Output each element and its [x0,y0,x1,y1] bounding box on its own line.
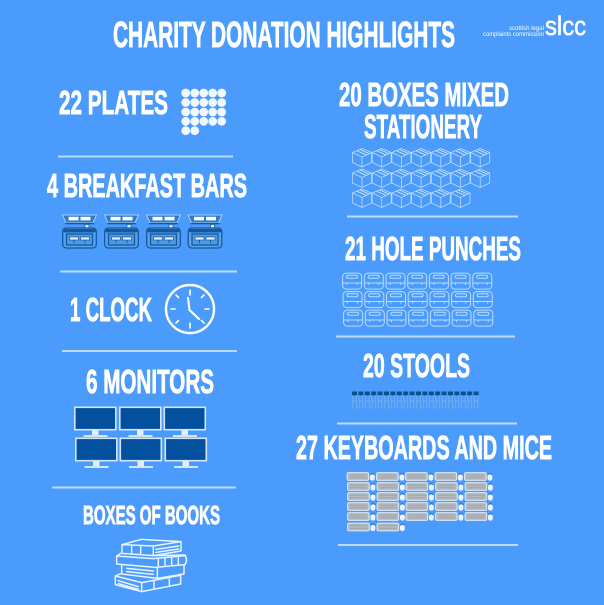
heading: boxes of books: BOXES OF BOOKS [83,500,220,530]
icon: 20 boxes [352,148,490,208]
panel: stools [352,347,479,408]
panel: boxes of books [83,500,220,592]
icon: 27 keyboards and mice [347,473,493,531]
heading: 20 boxes mixed stationery [339,76,509,145]
panel: mixed stationery [339,76,509,208]
logo: slcc: scottish legal [509,26,544,32]
heading: 6 monitors: 6 MONITORS [86,363,214,400]
panel: clock [70,285,214,333]
icon: 22 plates grid [181,89,226,135]
panel: keyboards and mice [296,429,552,531]
logo: slcc: complaints commission [483,32,544,38]
panel: breakfast bars [47,167,247,248]
heading: 1 clock: 1 CLOCK [70,291,152,328]
panel: monitors [75,363,214,468]
logo: slcc [483,11,586,41]
heading: 20 boxes mixed stationery: STATIONERY [364,108,482,145]
logo: slcc: slcc [545,11,586,41]
icon: clock [166,285,214,333]
icon: 6 monitors [75,407,206,468]
icon: stack of books [115,539,186,592]
icon: 20 stools [352,392,479,408]
panel: plates [59,84,226,135]
heading: 20 stools: 20 STOOLS [363,347,470,384]
heading: 4 breakfast bars: 4 BREAKFAST BARS [47,167,247,204]
heading: 22 plates: 22 PLATES [59,84,168,121]
panel: hole punches [343,230,521,326]
icon: 4 breakfast bars [62,215,222,248]
icon: 21 hole punches [343,273,493,326]
